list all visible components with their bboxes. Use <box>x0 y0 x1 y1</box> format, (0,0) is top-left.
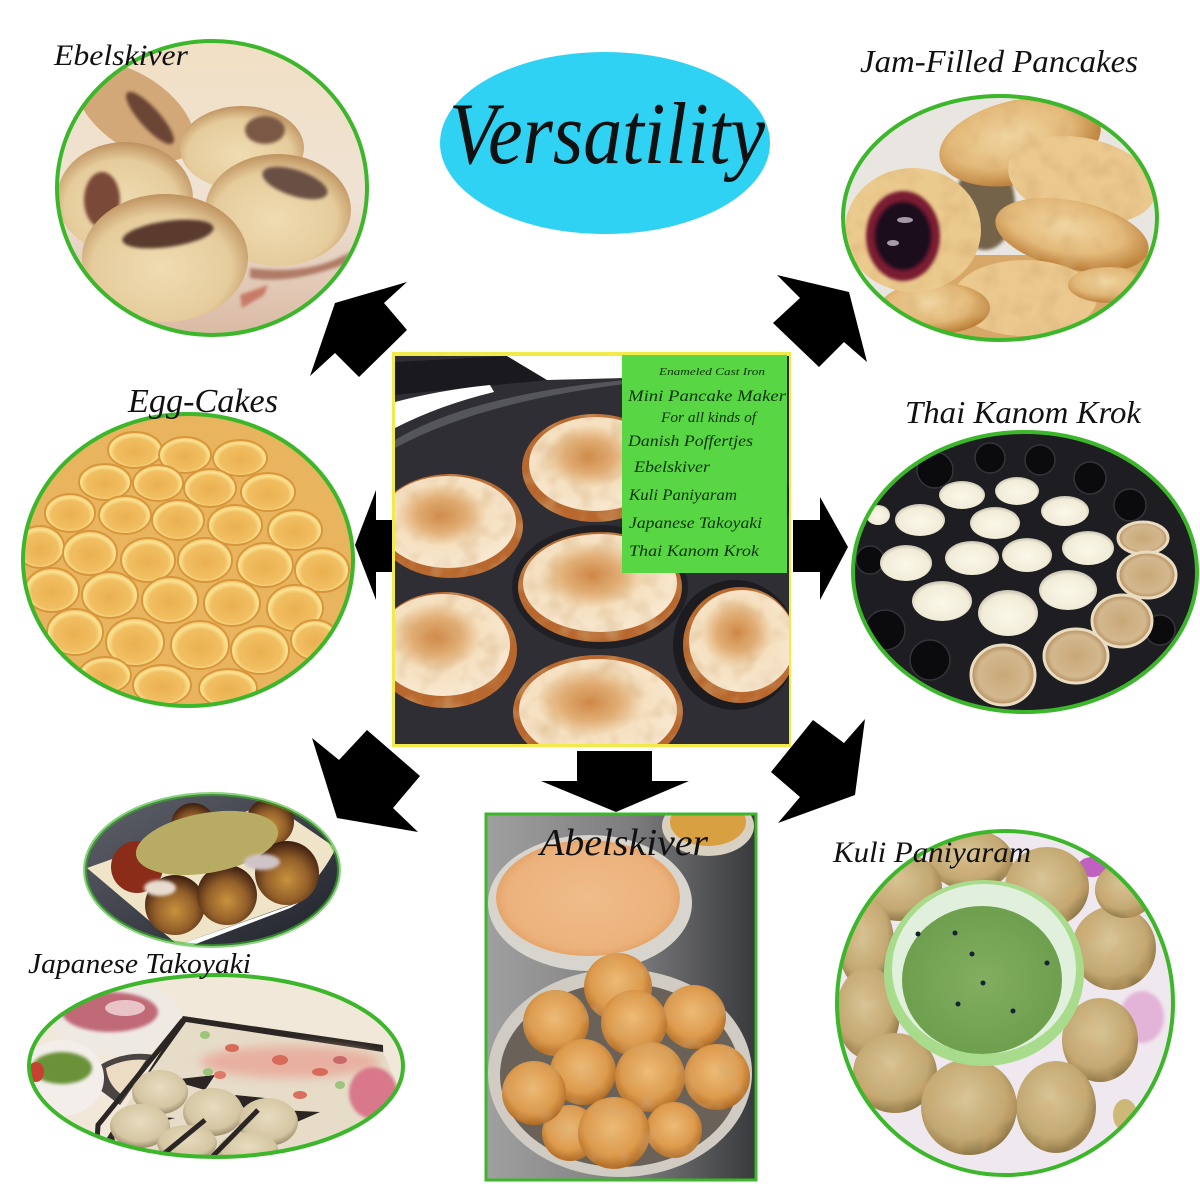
info box: Japanese Takoyaki <box>629 515 762 532</box>
label: Egg-Cakes: Egg-Cakes <box>127 383 278 420</box>
info box: For all kinds of <box>660 410 758 426</box>
label: Jam-Filled Pancakes: Jam-Filled Pancakes <box>860 43 1138 79</box>
panel: Abelskiver photo <box>486 796 756 1180</box>
info box <box>622 355 787 573</box>
arrow: to Thai Kanom Krok <box>793 497 848 600</box>
panel: Egg-Cakes photo <box>16 410 360 710</box>
info box: Mini Pancake Maker <box>627 388 787 405</box>
info box: Kuli Paniyaram <box>628 487 737 504</box>
info box: Ebelskiver <box>633 459 711 476</box>
label: Japanese Takoyaki: Japanese Takoyaki <box>28 949 251 980</box>
info box: Enameled Cast Iron <box>658 366 766 378</box>
panel: central pan photo <box>392 352 791 747</box>
label: Kuli Paniyaram: Kuli Paniyaram <box>832 836 1031 869</box>
panel: Takoyaki plate photo <box>80 790 345 950</box>
arrow: to Takoyaki <box>312 730 420 832</box>
label: Abelskiver: Abelskiver <box>537 822 708 864</box>
info box: Danish Poffertjes <box>627 433 753 450</box>
arrow: to Kuli Paniyaram <box>771 719 865 823</box>
panel: Japanese Takoyaki photo <box>20 970 410 1168</box>
arrow: to Ebelskiver <box>310 282 407 377</box>
panel: Jam-Filled Pancakes photo <box>840 84 1164 345</box>
title badge <box>440 52 770 234</box>
info box: Thai Kanom Krok <box>629 543 760 560</box>
label: Ebelskiver: Ebelskiver <box>53 39 188 72</box>
title ellipse <box>440 52 770 234</box>
panel: Kuli Paniyaram photo <box>830 825 1180 1190</box>
title: Versatility <box>449 86 766 183</box>
arrow: to Jam-Filled Pancakes <box>773 275 867 367</box>
arrow: to Egg-Cakes <box>355 490 392 600</box>
panel: Thai Kanom Krok photo <box>850 430 1200 715</box>
arrow: to Abelskiver <box>541 751 689 812</box>
panel: Ebelskiver photo <box>50 35 375 340</box>
label: Thai Kanom Krok: Thai Kanom Krok <box>905 394 1142 430</box>
